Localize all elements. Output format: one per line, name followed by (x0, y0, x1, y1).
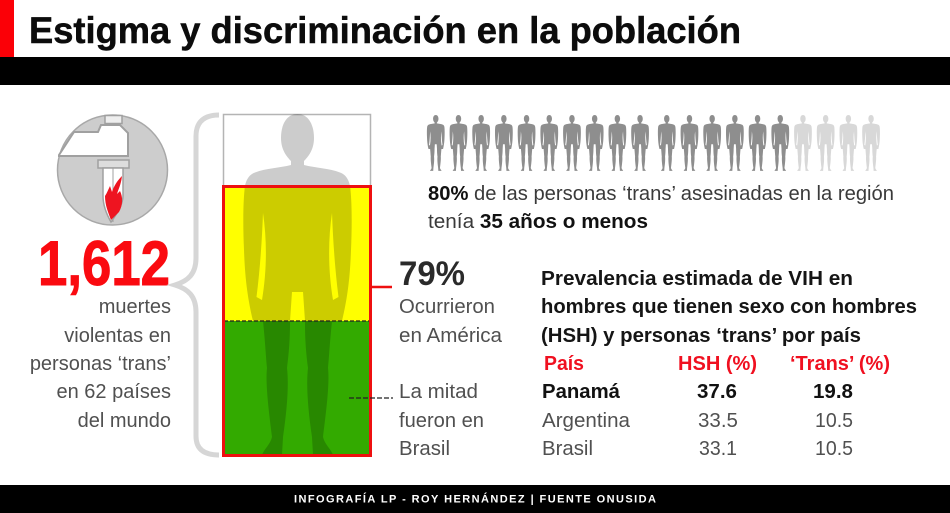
stat: 79% (399, 255, 503, 347)
chart: human figure proportion (223, 114, 370, 456)
figure silhouette (243, 114, 352, 455)
stat: 79%: Ocurrieron (399, 296, 495, 318)
row: Argentina: 10.5 (815, 410, 853, 432)
table header: HSH (%) (678, 353, 757, 375)
text: half in Brazil: La mitad (399, 381, 478, 403)
text: deaths description: en 62 países (56, 381, 171, 403)
table header: ‘Trans’ (%) (790, 353, 890, 375)
row: Brasil: Brasil (542, 438, 593, 460)
title band (0, 0, 950, 85)
row: Brasil: 10.5 (815, 438, 853, 460)
heading: prevalence table: hombres que tienen sexo con hombres (541, 296, 917, 318)
text: deaths description (30, 296, 171, 432)
row: Panamá: 19.8 (813, 381, 853, 403)
row: Argentina (542, 410, 853, 432)
icon: blade and flame (58, 115, 168, 225)
heading: prevalence table (541, 268, 917, 347)
text: deaths description: violentas en (64, 325, 171, 347)
row: Panamá: Panamá (542, 381, 621, 403)
pictogram: 16 of 20 figures (427, 115, 880, 171)
footer: INFOGRAFÍA LP - ROY HERNÁNDEZ | FUENTE ONUSIDA (294, 492, 656, 506)
text: deaths description: muertes (99, 296, 171, 318)
text: deaths description: personas ‘trans’ (30, 353, 171, 375)
big number: 1,612 (38, 229, 170, 299)
brace (175, 115, 219, 455)
footer (0, 485, 950, 513)
heading: prevalence table: (HSH) y personas ‘trans’ por país (541, 325, 861, 347)
title: Estigma y discriminación en la población (29, 10, 741, 51)
row: Argentina: Argentina (542, 410, 631, 432)
stat: 79%: 79% (399, 255, 465, 293)
row: Brasil: 33.1 (699, 438, 737, 460)
table: prevalence by country (542, 353, 890, 460)
heading: prevalence table: Prevalencia estimada de VIH en (541, 268, 853, 290)
arrow: dashed connector Brasil (349, 397, 393, 399)
row: Argentina: 33.5 (698, 410, 738, 432)
text: deaths description: del mundo (78, 410, 171, 432)
row: Brasil (542, 438, 853, 460)
stat: 79%: en América (399, 325, 503, 347)
text: 80% statement: tenía 35 años o menos (428, 211, 648, 233)
text: half in Brazil: Brasil (399, 438, 450, 460)
text: half in Brazil: fueron en (399, 410, 484, 432)
row: Panamá: 37.6 (697, 381, 737, 403)
text: 80% statement: 80% de las personas ‘trans’ asesinadas en la región (428, 183, 894, 205)
table header: País (544, 353, 584, 375)
arrow: connector 79% (370, 286, 392, 288)
table header (544, 353, 890, 375)
text: 80% statement (428, 183, 894, 233)
text: half in Brazil (399, 381, 484, 460)
row: Panamá (542, 381, 853, 403)
